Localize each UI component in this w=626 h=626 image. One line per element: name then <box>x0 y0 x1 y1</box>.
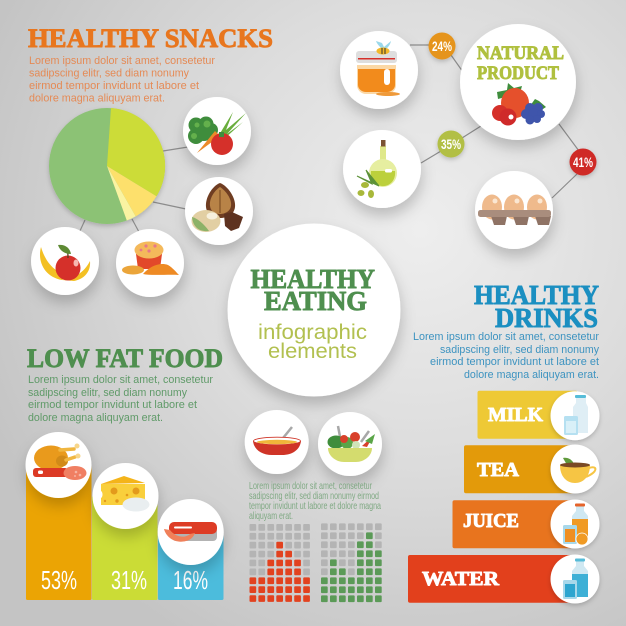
title: healthy eating: EATING <box>264 286 367 316</box>
heading: healthy drinks <box>474 280 599 333</box>
label: natural product <box>477 44 564 84</box>
drink bar: tea <box>464 444 600 494</box>
central title circle <box>228 224 400 396</box>
icon: soup bowl <box>245 410 309 474</box>
icon: cheese <box>92 463 158 529</box>
badge: 41%: 41% <box>573 154 593 170</box>
badge: 41% <box>570 148 596 176</box>
drink bar: milk: MILK <box>488 405 544 426</box>
bar: 53%: 53% <box>41 565 77 595</box>
text block: snacks description: Lorem ipsum dolor sit amet, consetetur <box>29 55 215 67</box>
pictogram chart: right green grid <box>321 523 382 602</box>
text block: drinks description <box>413 331 599 381</box>
drink bar: water <box>408 554 600 604</box>
icon: chicken and sausage <box>26 432 92 498</box>
text block: low fat description: sadipscing elitr, sed diam nonumy <box>28 387 187 399</box>
text block: low fat description: dolore magna aliquyam erat. <box>28 412 163 424</box>
text block: low fat description <box>28 374 213 424</box>
subtitle: infographic elements <box>258 320 367 363</box>
icon: vegetables <box>183 97 251 165</box>
title: healthy eating <box>250 264 375 316</box>
pie chart <box>49 108 165 224</box>
pictogram chart: left red grid <box>250 524 310 602</box>
text block: low fat description: eirmod tempor invidunt ut labore et <box>28 399 197 411</box>
icon: honey jar <box>340 31 418 109</box>
icon: natural product circle <box>460 24 576 140</box>
heading: low fat food: LOW FAT FOOD <box>27 344 223 373</box>
subtitle: infographic elements: elements <box>268 339 357 363</box>
icon: salad bowl <box>318 412 382 476</box>
heading: healthy drinks: DRINKS <box>495 303 598 333</box>
text block: drinks description: eirmod tempor invidunt ut labore et <box>430 356 599 368</box>
text block: snacks description: sadipscing elitr, sed diam nonumy <box>29 68 189 80</box>
icon: water bottle and glass <box>563 558 588 599</box>
icon: fruit <box>31 227 99 295</box>
drink bar: juice: JUICE <box>463 511 519 532</box>
text block: drinks description: dolore magna aliquyam erat. <box>464 369 599 381</box>
icon: nuts <box>185 177 253 245</box>
icon: tea cup <box>560 458 595 483</box>
subtitle: infographic elements: infographic <box>258 320 367 344</box>
drink bar: juice <box>452 500 600 548</box>
text block: grid description: aliquyam erat. <box>249 510 293 522</box>
bar chart: low fat food <box>26 465 224 600</box>
bar: 31% <box>92 496 158 600</box>
title: healthy eating: HEALTHY <box>250 264 375 294</box>
drink bar: milk <box>478 391 600 440</box>
label: natural product: PRODUCT <box>477 64 560 84</box>
icon: eggs <box>475 171 553 249</box>
badge: 24% <box>428 32 456 60</box>
text block: snacks description: eirmod tempor invidunt ut labore et <box>29 80 199 92</box>
text block: grid description: sadipscing elitr, sed diam nonumy eirmod <box>249 490 379 502</box>
bar: 16%: 16% <box>173 565 208 595</box>
connector lines <box>79 45 579 233</box>
icon: juice bottle and orange <box>563 504 588 545</box>
icon: fish and shrimp <box>158 499 224 565</box>
bar: 53% <box>26 465 92 600</box>
icon: milk bottle and glass <box>564 395 588 435</box>
text block: snacks description: dolore magna aliquyam erat. <box>29 92 165 104</box>
bar: 31%: 31% <box>111 565 147 595</box>
text block: drinks description: sadipscing elitr, sed diam nonumy <box>440 344 599 356</box>
icon: berries <box>492 83 546 126</box>
heading: healthy drinks: HEALTHY <box>474 280 599 310</box>
text block: grid description: tempor invidunt ut labore et dolore magna <box>249 500 381 512</box>
badge: 35%: 35% <box>441 136 461 152</box>
label: natural product: NATURAL <box>477 44 564 64</box>
text block: low fat description: Lorem ipsum dolor sit amet, consetetur <box>28 374 213 386</box>
drink bar: tea: TEA <box>477 460 519 481</box>
text block: grid description: Lorem ipsum dolor sit amet, consetetur <box>249 480 372 492</box>
icon: olive oil <box>343 130 421 208</box>
icon: muffin and pastry <box>116 229 184 297</box>
heading: healthy snacks: HEALTHY SNACKS <box>28 24 273 53</box>
drink bar: water: WATER <box>422 569 500 590</box>
badge: 35% <box>438 130 464 158</box>
text block: grid description <box>249 480 381 522</box>
text block: drinks description: Lorem ipsum dolor sit amet, consetetur <box>413 331 599 343</box>
text block: snacks description <box>29 55 215 104</box>
bar: 16% <box>158 532 224 600</box>
badge: 24%: 24% <box>432 38 452 54</box>
